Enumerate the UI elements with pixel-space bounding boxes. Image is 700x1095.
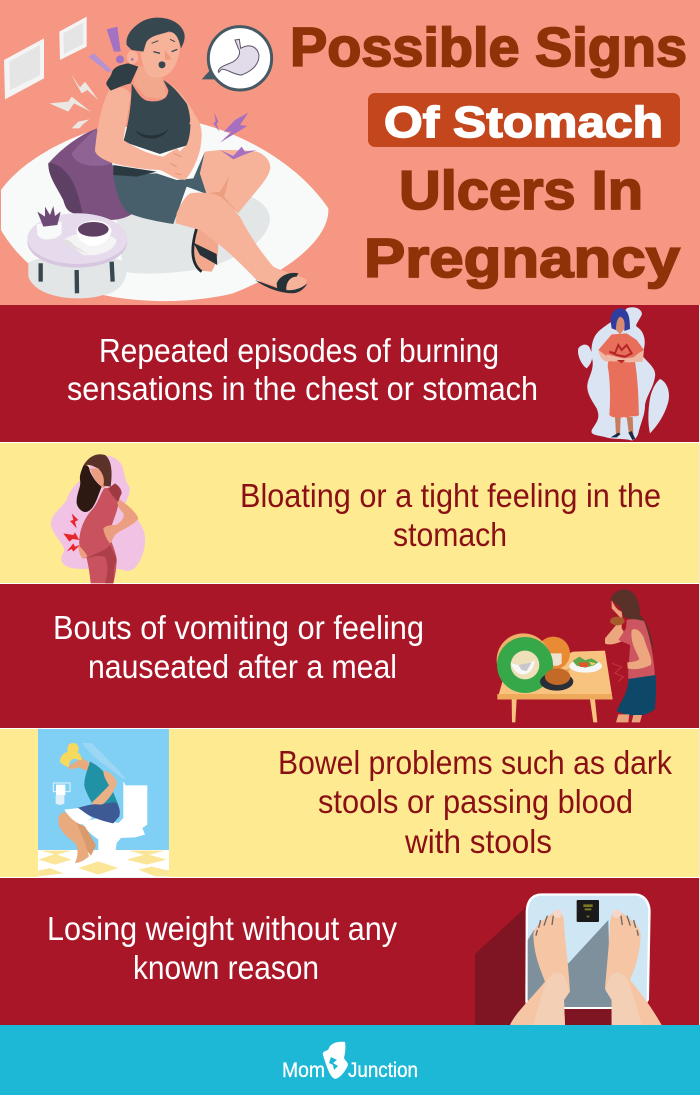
text: bloating [240, 477, 661, 553]
title [290, 16, 687, 289]
text: weight loss [47, 910, 397, 986]
panel: burning sensations [0, 305, 700, 442]
icon: table with food and nauseous woman [497, 589, 656, 722]
icon: woman with chest pain [578, 307, 669, 440]
text: weight loss: known reason [133, 949, 319, 986]
MomJunction logo: Junction [348, 1059, 418, 1082]
title: Pregnancy [364, 227, 680, 289]
panel: vomiting [0, 584, 700, 728]
icon: pregnant woman with bloating [51, 454, 145, 583]
text: bloating: stomach [393, 516, 507, 553]
text: bowel problems [278, 744, 672, 860]
text: burning sensations: Repeated episodes of burning [99, 332, 499, 369]
icon: feet on weighing scale [475, 893, 662, 1025]
header panel [0, 0, 700, 305]
text: vomiting [53, 609, 424, 685]
MomJunction logo [282, 1042, 418, 1082]
title: Of Stomach [384, 98, 663, 147]
text: burning sensations: sensations in the chest or stomach [67, 370, 538, 407]
text: weight loss: Losing weight without any [47, 910, 397, 947]
text: bowel problems: with stools [404, 823, 552, 860]
hero illustration: woman with stomach pain [1, 17, 328, 301]
text: bowel problems: stools or passing blood [318, 783, 633, 820]
text: burning sensations [67, 332, 538, 407]
MomJunction logo: Mom [282, 1059, 325, 1082]
panel: bowel problems [0, 729, 700, 877]
text: vomiting: Bouts of vomiting or feeling [53, 609, 424, 646]
title: Ulcers In [399, 159, 643, 221]
text: vomiting: nauseated after a meal [88, 648, 397, 685]
icon: woman on toilet [38, 729, 169, 877]
text: bowel problems: Bowel problems such as dark [278, 744, 672, 781]
footer band [0, 1025, 700, 1095]
panel: bloating [0, 443, 700, 583]
panel: weight loss [0, 878, 700, 1025]
title: Possible Signs [290, 16, 687, 78]
text: bloating: Bloating or a tight feeling in the [240, 477, 661, 514]
